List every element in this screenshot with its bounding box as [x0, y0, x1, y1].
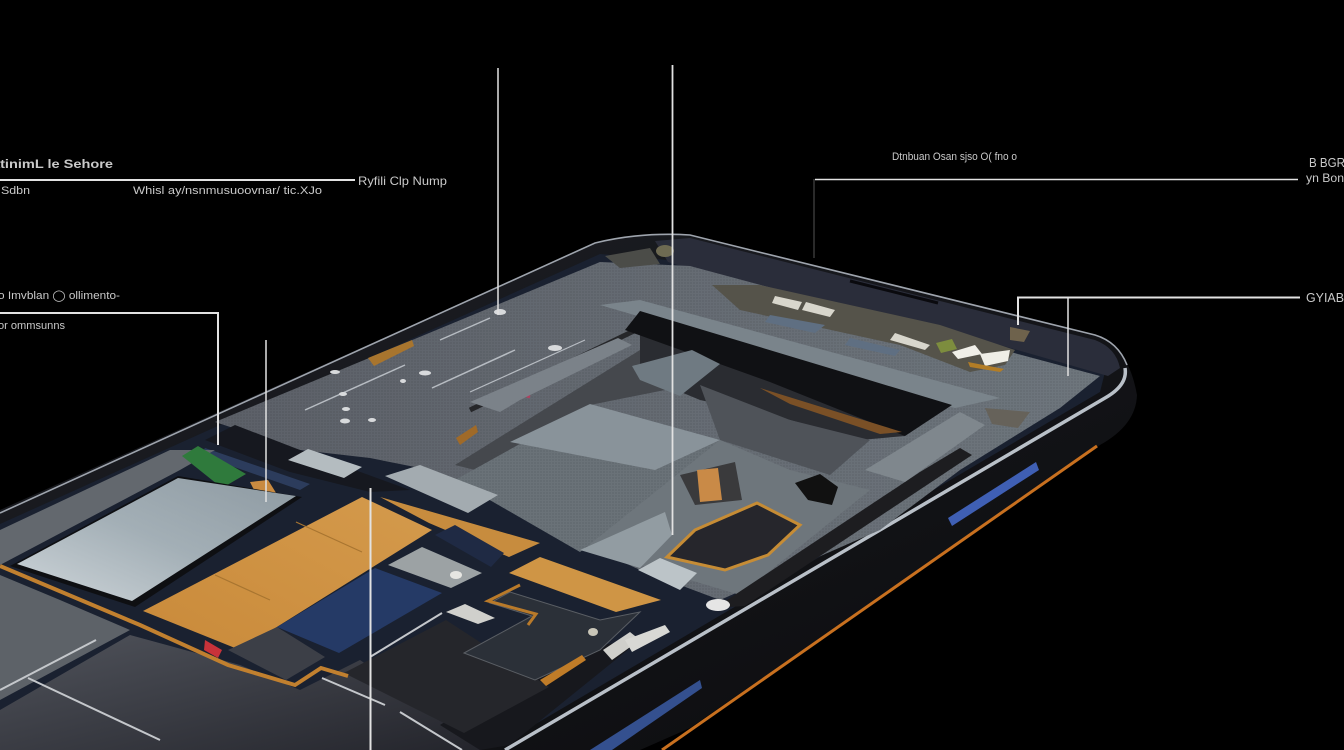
callout: vertical to battery — [265, 340, 267, 502]
interior base — [0, 254, 1105, 750]
callout: vertical from bottom — [370, 488, 372, 750]
navy strip — [435, 525, 504, 567]
main grey plate — [215, 262, 1100, 600]
silver clip right — [603, 632, 640, 660]
callout: vertical to board — [497, 68, 499, 315]
orange battery pack — [143, 497, 432, 650]
silver clip left — [446, 604, 495, 624]
label: top left description: Whisl ay/nsnmusuoovnar/ tic.XJo — [133, 185, 322, 197]
callout: left elbow — [0, 313, 218, 445]
connector bracket dark — [205, 425, 410, 492]
orange side edge — [662, 446, 1097, 750]
right corner part — [985, 408, 1030, 428]
label: top right heading: Dtnbuan Osan sjso O( fno o — [892, 151, 1017, 163]
cavity grey sheet — [632, 350, 720, 396]
green circuit board — [182, 446, 246, 488]
dark band under seam — [455, 350, 690, 470]
board seam highlights — [305, 318, 585, 410]
silver battery panel — [10, 476, 302, 607]
orange pad right — [509, 557, 661, 612]
label: far right lower: yn Bon — [1306, 171, 1344, 185]
light diagonal band — [470, 338, 632, 412]
right circuit module — [464, 592, 640, 680]
top left corner speckle — [605, 248, 660, 268]
red marker — [204, 640, 222, 658]
module orange bracket — [488, 585, 536, 625]
right side light plate — [865, 412, 985, 482]
top corner gold part — [656, 245, 674, 257]
phone illustration — [0, 234, 1137, 750]
silver clip far right — [625, 625, 670, 652]
callout: vertical to sheet — [672, 65, 674, 535]
silver tab — [638, 558, 697, 590]
label: top left sub: Sdbn — [1, 185, 30, 197]
orange outlined dark module — [667, 503, 800, 570]
orange spot — [250, 480, 278, 498]
orange strip — [380, 497, 540, 557]
left lower grey region — [0, 575, 130, 700]
callout: top right drop — [813, 179, 815, 258]
speaker slot — [850, 281, 938, 303]
phone body silhouette — [0, 234, 1137, 750]
pink marker — [511, 391, 530, 397]
left top plate — [0, 450, 215, 565]
white round component — [588, 628, 598, 636]
labels — [0, 151, 1344, 332]
orange connector mid — [456, 425, 478, 445]
silver tab lower — [385, 465, 498, 513]
cavity copper trace — [760, 388, 902, 434]
board solder dots — [330, 309, 562, 424]
black lower panel — [344, 620, 549, 733]
central light sheet — [455, 405, 720, 552]
orange small strip — [540, 655, 586, 686]
white chips — [772, 296, 930, 350]
lighter panel — [510, 404, 720, 470]
connector blue stripe — [200, 448, 310, 490]
silver bar — [580, 512, 672, 568]
silver tab upper — [288, 449, 362, 478]
blue tint strips on plate — [765, 315, 825, 333]
orange left trace — [0, 566, 348, 685]
side buttons — [590, 462, 1039, 750]
silver rim — [505, 368, 1125, 750]
cavity black band — [625, 311, 952, 436]
dark bottom strip — [440, 640, 640, 750]
label: top left line end: Ryfili Clp Nump — [358, 174, 447, 188]
white button dot — [706, 599, 730, 611]
central cavity — [640, 330, 905, 440]
grey small panel — [228, 627, 325, 680]
right side dark gutter — [715, 448, 972, 608]
top component strip — [712, 285, 1030, 372]
diagonal seam — [470, 328, 640, 410]
top bezel — [655, 238, 1120, 376]
callout: right elbow — [1018, 298, 1300, 325]
circuit strip — [700, 385, 870, 475]
orange chip — [680, 462, 742, 505]
outer rim highlight — [0, 234, 1127, 513]
label: left elbow title: o Imvblan ◯ ollimento- — [0, 290, 120, 302]
orange connector top — [368, 340, 414, 366]
silver sticker — [388, 547, 482, 588]
lower left dark panel — [0, 635, 480, 750]
black box — [795, 474, 838, 505]
long light band — [600, 300, 1000, 408]
blue display panel — [277, 568, 442, 653]
lower right plate — [585, 440, 870, 595]
callout: right drop — [1067, 297, 1069, 376]
white panel lines — [0, 613, 462, 750]
callout: top right horizontal — [815, 178, 1298, 180]
callout: top left horizontal — [0, 179, 355, 181]
